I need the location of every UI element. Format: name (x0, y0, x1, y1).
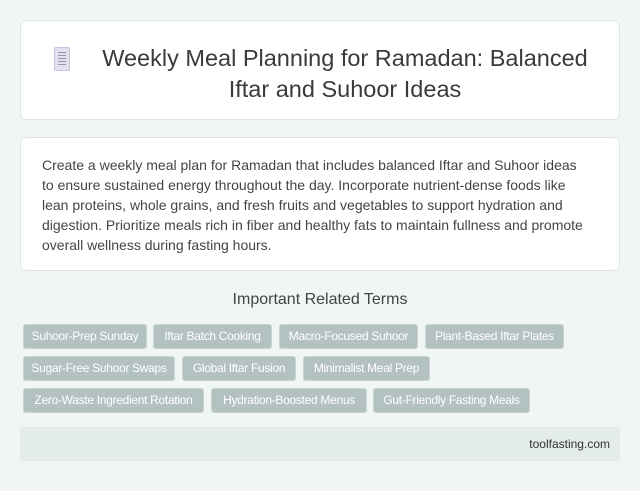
tags: Iftar Batch Cooking (164, 329, 261, 343)
icon: scroll (54, 47, 70, 71)
tags: Plant-Based Iftar Plates (435, 329, 554, 343)
tags: Gut-Friendly Fasting Meals (383, 393, 520, 407)
tags: Global Iftar Fusion (193, 361, 285, 375)
tags: Hydration-Boosted Menus (223, 393, 355, 407)
tags: Macro-Focused Suhoor (289, 329, 408, 343)
tags: Zero-Waste Ingredient Rotation (34, 393, 192, 407)
title: Weekly Meal Planning for Ramadan: Balanced Iftar and Suhoor Ideas (102, 45, 588, 102)
description text: Create a weekly meal plan for Ramadan that includes balanced Iftar and Suhoor ideas to ensure sustained energy throughout the day. Incorporate nutrient-dense foods like lean proteins, whole grains, and fresh fruits and vegetables to support hydration and digestion. Prioritize meals rich in fiber and healthy fats to maintain fullness and promote overall wellness during fasting hours. (42, 157, 583, 253)
header card (20, 20, 620, 120)
heading: related terms: Important Related Terms (233, 291, 407, 308)
tags: Sugar-Free Suhoor Swaps (31, 361, 167, 375)
footer (20, 427, 620, 461)
footer text: toolfasting.com (529, 437, 610, 451)
tags: Minimalist Meal Prep (314, 361, 419, 375)
description card (20, 137, 620, 271)
tags: Suhoor-Prep Sunday (32, 329, 138, 343)
